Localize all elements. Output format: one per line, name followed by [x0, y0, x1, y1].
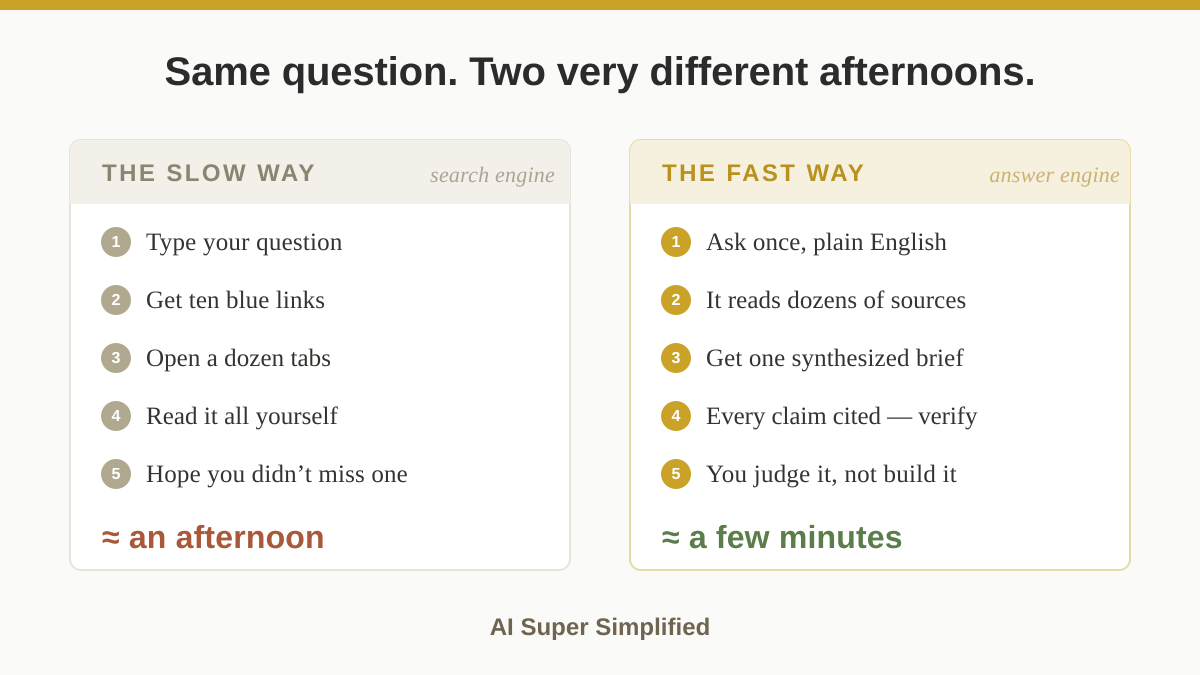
- fast way header: [630, 140, 1130, 204]
- title: Same question. Two very different afternoons.: [165, 50, 1035, 94]
- slow step 5: 5: [112, 466, 120, 483]
- slow way header: [70, 140, 570, 204]
- fast step 2: It reads dozens of sources: [706, 287, 966, 314]
- slow step 5: Hope you didn’t miss one: [146, 461, 408, 488]
- slow result: ≈ an afternoon: [102, 519, 325, 555]
- slow step 3: 3: [112, 350, 120, 367]
- fast step 4: Every claim cited — verify: [706, 403, 977, 430]
- panel: the fast way: [629, 139, 1131, 571]
- fast step 3: 3: [672, 350, 680, 367]
- slow way heading: THE SLOW WAY: [102, 160, 317, 187]
- slow step 4: 4: [112, 408, 120, 425]
- fast way heading: THE FAST WAY: [662, 160, 866, 187]
- fast step 3: Get one synthesized brief: [706, 345, 964, 372]
- slow step 4: Read it all yourself: [146, 403, 338, 430]
- slow step 2: Get ten blue links: [146, 287, 325, 314]
- fast step 2: 2: [672, 292, 680, 309]
- slow step 1: 1: [112, 234, 120, 251]
- fast way subtitle: answer engine: [989, 162, 1120, 187]
- slow step 2: 2: [112, 292, 120, 309]
- panel: the slow way: [69, 139, 571, 571]
- footer brand: AI Super Simplified: [490, 614, 710, 641]
- fast result: ≈ a few minutes: [662, 519, 903, 555]
- fast step 1: Ask once, plain English: [706, 229, 947, 256]
- fast step 1: 1: [672, 234, 680, 251]
- slow step 1: Type your question: [146, 229, 343, 256]
- fast step 5: 5: [672, 466, 680, 483]
- slow way subtitle: search engine: [430, 162, 555, 187]
- slow step 3: Open a dozen tabs: [146, 345, 331, 372]
- fast step 5: You judge it, not build it: [706, 461, 957, 488]
- top accent bar: [0, 0, 1200, 10]
- fast step 4: 4: [672, 408, 680, 425]
